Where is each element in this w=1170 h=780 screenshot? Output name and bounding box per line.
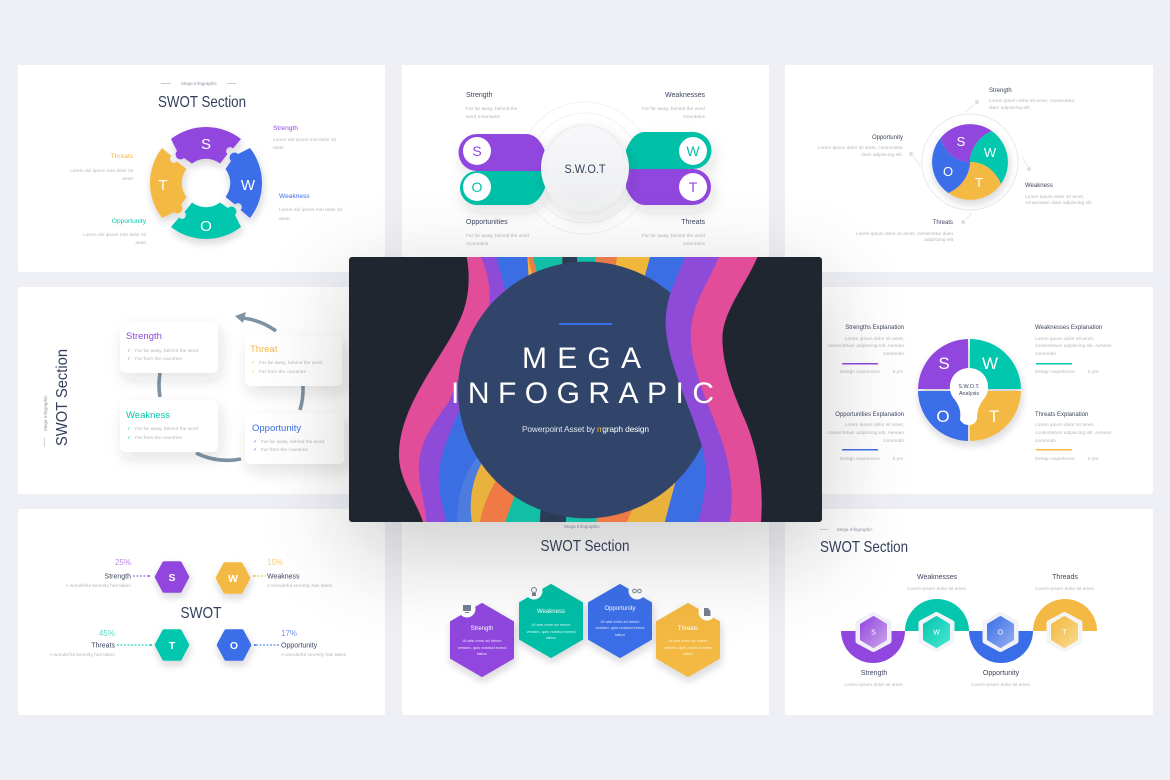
card: threat: ✓ (251, 369, 255, 375)
swirl letters: T (975, 175, 983, 190)
text: opportunities (827, 412, 904, 462)
hero shadow (349, 280, 822, 555)
label: opportunity (971, 670, 1031, 688)
hero title line 2: INFOGRAPIC (451, 377, 714, 410)
icon: tape (628, 582, 646, 600)
text: threats (1035, 412, 1112, 462)
hero tagline: Powerpoint Asset by rrgraph design (522, 424, 649, 434)
quadrant letters: T (989, 407, 999, 426)
label: threats: Far far away, behind the word (642, 233, 705, 239)
ring letters: W (241, 177, 256, 194)
stat: strength (66, 558, 131, 589)
label: weaknesses (907, 574, 967, 592)
pill letter badges: T (689, 179, 698, 195)
quadrant letters: W (982, 354, 998, 373)
eyebrow label: Mega Infographic (564, 524, 600, 529)
text: threats: Lorem ipsum dolor sit amet, (1035, 422, 1094, 428)
panel card (18, 509, 385, 715)
stat: weakness: Weakness (267, 574, 300, 580)
label: threats: Threats (933, 220, 953, 226)
panel: cycle cards (18, 287, 385, 494)
quadrant letters: S (938, 354, 950, 373)
card: strength: ✓ (127, 348, 131, 354)
hexagon W: W (933, 630, 940, 636)
card: opportunity: ✓ (253, 447, 257, 453)
label: threats: mountains (683, 241, 706, 247)
card: weakness: Weakness (126, 410, 170, 421)
label: strength: Strength (273, 125, 298, 132)
outer ring and leader lines (913, 104, 1028, 220)
stat: opportunity: Opportunity (281, 642, 318, 650)
panel card (785, 287, 1153, 494)
card: weakness: ✓ (127, 435, 131, 441)
swirl chart (932, 124, 1008, 200)
label: weakness: Weakness (279, 193, 310, 200)
stat: strength: A wonderful serenity has taken (66, 583, 131, 589)
hexagon: strength: Strength (471, 626, 493, 632)
dashed connectors (117, 576, 279, 645)
label: threats (642, 219, 706, 247)
stat: opportunity (281, 629, 347, 658)
label: weaknesses: Lorem ipsum dolor sit amet, (907, 586, 967, 592)
panel: pills with central disc (402, 65, 769, 272)
hexagon T: T (169, 640, 176, 652)
stat: strength: 25% (115, 558, 131, 567)
label: threats (70, 153, 134, 182)
cycle arrows (159, 312, 303, 460)
hexagon S: S (871, 630, 876, 636)
hexagon: threats: veniam, quis nostrud exerci (664, 645, 712, 650)
card: threat: Far far away, behind the word (259, 360, 322, 366)
text: opportunities: commodo (883, 438, 904, 444)
hexagon: threats: Ut wisi enim ad minim (669, 638, 708, 643)
hexagon O: O (998, 630, 1004, 636)
half ring T (1033, 599, 1097, 631)
title: SWOT Section (158, 94, 246, 111)
text: weaknesses: 5 yrs (1088, 369, 1099, 375)
label: weaknesses: Weaknesses (665, 92, 705, 99)
label: opportunities (466, 219, 529, 247)
rotated eyebrow: Mega Infographic (43, 395, 48, 431)
icon: monitor (458, 600, 476, 618)
label: threats: Threats (681, 219, 705, 226)
label: opportunity: Lorem ipsum dolor sit amet, consectetur (818, 145, 903, 151)
label: weakness: Lorem ipsum dolor sit amet, (1025, 194, 1084, 200)
text: opportunities: Lorem ipsum dolor sit amet, (845, 422, 904, 428)
card: strength: Far far away, behind the word (135, 348, 198, 354)
pill letter badges: W (686, 143, 700, 159)
label: opportunities: Opportunities (466, 219, 508, 226)
card: strength (120, 322, 218, 373)
label: threats: amet (122, 176, 134, 182)
text: strengths: Lorem ipsum dolor sit amet, (845, 336, 904, 342)
label: opportunity: Opportunity (112, 218, 147, 225)
hexagon: weakness (520, 585, 582, 657)
hexagon T (156, 631, 188, 659)
text: weaknesses: commodo (1035, 351, 1056, 357)
bulb label: S.W.O.T. (958, 384, 980, 390)
card: opportunity: Far far away, behind the word (261, 439, 324, 445)
leader dots (909, 100, 1031, 224)
hexagon: weakness: tation (546, 635, 556, 640)
hexagon: threats (657, 604, 719, 676)
pill letter badges: O (472, 179, 483, 195)
label: opportunity: Opportunity (983, 670, 1020, 677)
swirl letters: S (957, 134, 966, 149)
hexagon: threats: Threats (678, 626, 698, 632)
stat: opportunity: A wonderful serenity has taken (281, 652, 347, 658)
text: threats: 5 yrs (1088, 456, 1099, 462)
half ring S (841, 631, 905, 663)
label: strength: diam adipiscing elit. (989, 105, 1031, 111)
bulb label: Analysis (959, 391, 979, 397)
hexagon: strength (451, 604, 513, 676)
panel: wave of half rings (785, 509, 1153, 715)
hexagon: weakness: Weakness (537, 609, 565, 615)
quadrant letters (936, 354, 999, 426)
card: opportunity (245, 413, 344, 464)
icon: document (698, 604, 716, 620)
card: weakness: ✓ (127, 426, 131, 432)
bulb cutout (950, 368, 988, 425)
label: weaknesses: mountains (683, 114, 706, 120)
label: strength: Strength (861, 670, 887, 677)
label: weakness: consectetur diam adipiscing elit. (1025, 200, 1093, 206)
eyebrow rule (44, 438, 46, 447)
text: opportunities: Opportunities Explanation (835, 412, 904, 418)
label: strength (466, 92, 518, 120)
hexagon: strength: veniam, quis nostrud exerci (458, 645, 506, 650)
hexagon O: O (230, 640, 238, 652)
ring letters: T (158, 177, 168, 194)
pills left (459, 134, 545, 205)
half ring W (905, 599, 969, 631)
stat: weakness (267, 558, 333, 589)
pill letter badges: S (472, 143, 482, 159)
panel card (402, 509, 769, 715)
swirl letters (943, 134, 997, 190)
hexagon: strength: tation (477, 651, 487, 656)
eyebrow rules (161, 82, 236, 84)
panel card (18, 287, 385, 494)
hexagon W (922, 615, 952, 649)
text: threats: Threats Explanation (1035, 412, 1088, 418)
text: weaknesses: Design experience (1035, 369, 1075, 375)
label: opportunity: Lorem dol ipsum met dolor sit (83, 232, 147, 238)
stat: threats: Threats (91, 642, 115, 650)
pills right (626, 132, 712, 205)
hexagon: strength: Ut wisi enim ad minim (463, 638, 502, 643)
label: strength: Lorem ipsum dolor sit amet, (844, 682, 904, 688)
hexagon: opportunity: Ut wisi enim ad minim (601, 619, 640, 624)
label: threats: Lorem ipsum dolor sit amet, consectetur diam (856, 231, 953, 237)
title: SWOT Section (540, 538, 630, 555)
card: threat: Threat (250, 344, 278, 355)
text: strengths (827, 325, 904, 375)
label: strength (273, 125, 337, 151)
text: weaknesses: Lorem ipsum dolor sit amet, (1035, 336, 1094, 342)
label: threads: Threads (1052, 574, 1078, 581)
stat: threats: A wonderful serenity has taken (50, 652, 115, 658)
text: threats: consectetuer adipiscing elit. Aenean (1035, 430, 1112, 436)
panel: hexagon cards (402, 509, 769, 715)
card: weakness: Far from the countries (135, 435, 183, 441)
text: weaknesses: consectetuer adipiscing elit. Aenean (1035, 343, 1112, 349)
card: weakness (120, 400, 218, 452)
hexagon W (218, 564, 248, 592)
hexagon S (156, 563, 188, 591)
icon: badge (526, 582, 542, 600)
ring letters: S (201, 136, 211, 153)
card: strength: Strength (126, 331, 162, 342)
hexagon: opportunity: tation (615, 632, 625, 637)
label: weaknesses: Far far away, behind the word (642, 106, 705, 112)
ring letters: O (200, 218, 212, 235)
label: opportunities: mountains (466, 241, 489, 247)
stat: opportunity: 17% (281, 629, 297, 638)
label: opportunity: amet (135, 240, 147, 246)
stat: weakness: A wonderful serenity has taken (267, 583, 333, 589)
label: threats: Threats (111, 153, 134, 160)
hexagon O (986, 615, 1016, 649)
card: opportunity: ✓ (253, 439, 257, 445)
hero card (349, 255, 822, 525)
eyebrow rule (820, 528, 828, 530)
label: opportunity: Lorem ipsum dolor sit amet, (971, 682, 1031, 688)
panel: puzzle ring SWOT (18, 65, 385, 272)
ring letters (158, 136, 256, 235)
label: weakness: Weakness (1025, 183, 1053, 189)
swirl letters: O (943, 164, 953, 179)
panel card (785, 65, 1153, 272)
label: threats (856, 220, 954, 243)
card: threat: ✓ (251, 360, 255, 366)
swirl letters: W (984, 145, 997, 160)
hexagon: weakness: Ut wisi enim ad minim (532, 622, 571, 627)
hexagon S (858, 615, 888, 649)
label: threats: Lorem dol ipsum met dolor sit (70, 168, 134, 174)
half ring O (969, 631, 1033, 663)
hero title line 1: MEGA (522, 342, 641, 375)
text: threats: Design experience (1035, 456, 1075, 462)
hexagon: opportunity: veniam, quis nostrud exerci (596, 625, 644, 630)
connector dots (148, 575, 256, 646)
label: strength: amet (273, 145, 284, 151)
hexagon: opportunity: Opportunity (604, 606, 636, 612)
label: opportunity: Opportunity (872, 135, 903, 141)
hexagon: weakness: veniam, quis nostrud exerci (527, 629, 575, 634)
central disc (541, 124, 629, 212)
label: strength (844, 670, 904, 688)
eyebrow label: Mega Infographic (181, 81, 217, 86)
title: SWOT Section (820, 539, 908, 556)
label: weakness (279, 193, 343, 222)
label: weakness: Lorem dol ipsum met dolor sit (279, 207, 343, 213)
stat: weakness: 15% (267, 558, 283, 567)
text: weaknesses (1035, 325, 1112, 375)
card: strength: ✓ (127, 356, 131, 362)
label: strength: Far far away, behind the (466, 106, 518, 112)
panel: percent hexagons (18, 509, 385, 715)
hexagon: threats: tation (683, 651, 693, 656)
puzzle ring chart (150, 127, 262, 239)
text: opportunities: 5 yrs (893, 456, 904, 462)
card: strength: Far from the countries (135, 356, 183, 362)
stat: threats: 45% (99, 629, 115, 638)
text: strengths: Strengths Explanation (845, 325, 904, 331)
label: threads (1035, 574, 1095, 592)
text: weaknesses: Weaknesses Explanation (1035, 325, 1102, 331)
eyebrow label: Mega Infographic (837, 527, 873, 532)
card: weakness: Far far away, behind the word (135, 426, 198, 432)
hero artwork (349, 255, 822, 525)
hexagon: opportunity (589, 585, 651, 657)
hexagon W: W (228, 573, 238, 585)
panel: swirl disc (785, 65, 1153, 272)
concentric rings (519, 102, 651, 234)
panel card (402, 65, 769, 272)
card: opportunity: Far from the countries (261, 447, 309, 453)
label: opportunity: diam adipiscing elit. (861, 152, 903, 158)
label: weaknesses (642, 92, 706, 120)
label: strength: Strength (466, 92, 493, 99)
text: opportunities: Design experience (840, 456, 880, 462)
quadrant letters: O (936, 407, 950, 426)
label: weakness (1025, 183, 1093, 206)
label: threads: Lorem ipsum dolor sit amet, (1035, 586, 1095, 592)
disc label: S.W.O.T (564, 162, 606, 176)
text: opportunities: consectetuer adipiscing elit. Aenean (827, 430, 904, 436)
panel: bulb quadrant chart (785, 287, 1153, 494)
text: strengths: 5 yrs (893, 369, 904, 375)
pill letter badges (463, 137, 707, 201)
quadrant donut (918, 339, 1021, 441)
card: threat (245, 335, 342, 386)
label: weaknesses: Weaknesses (917, 574, 957, 581)
card: opportunity: Opportunity (252, 423, 301, 434)
label: opportunity (818, 135, 903, 158)
label: opportunities: Far far away, behind the word (466, 233, 529, 239)
hexagon T (1050, 615, 1080, 649)
card: threat: Far from the countries (259, 369, 307, 375)
label: opportunity (83, 218, 147, 246)
text: strengths: consectetuer adipiscing elit. Aenean (827, 343, 904, 349)
label: strength: Lorem dol ipsum met dolor sit (273, 137, 337, 143)
label: strength: Strength (989, 88, 1012, 94)
label: strength: Lorem ipsum dolor sit amet, consectetur (989, 98, 1075, 104)
label: threats: adipiscing elit (924, 237, 954, 243)
label: strength: word mountains (466, 114, 500, 120)
hexagon O (218, 631, 250, 659)
stat: strength: Strength (105, 574, 131, 580)
stat: threats (50, 629, 115, 658)
label: strength (989, 88, 1075, 111)
center label: SWOT (180, 605, 222, 622)
text: threats: commodo (1035, 438, 1056, 444)
text: strengths: Design experience (840, 369, 880, 375)
panel card (785, 509, 1153, 715)
rotated title: SWOT Section (54, 349, 71, 446)
text: strengths: commodo (883, 351, 904, 357)
hexagon S: S (168, 572, 176, 584)
label: weakness: amet (279, 216, 290, 222)
bulb label (958, 384, 980, 397)
hexagon T: T (1062, 630, 1067, 636)
panel card (18, 65, 385, 272)
